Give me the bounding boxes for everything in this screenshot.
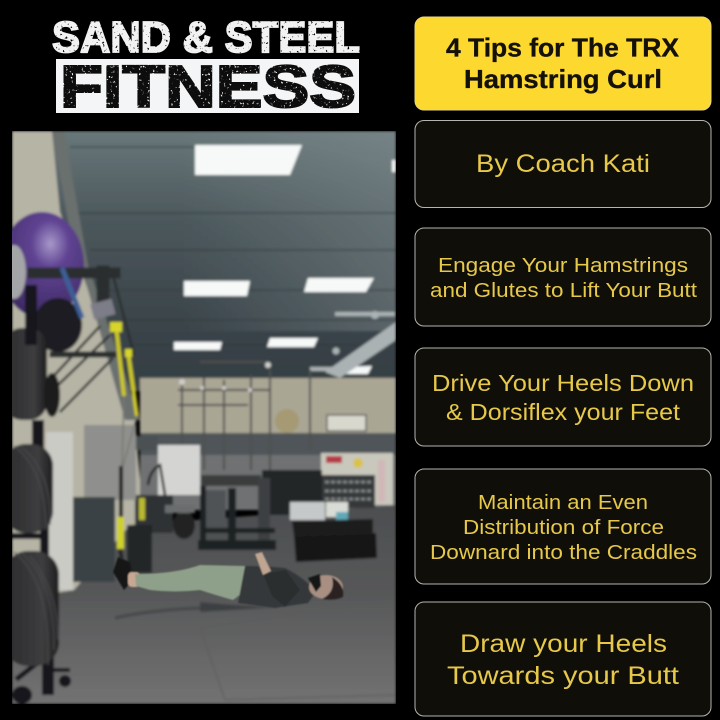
plyo boxes — [290, 502, 377, 562]
white ball edge — [12, 243, 28, 301]
hair — [322, 577, 343, 600]
white block wall — [46, 432, 73, 590]
treadmill and whiteboard — [130, 436, 200, 539]
panel: tip 1 — [415, 228, 711, 326]
dark shirt — [238, 566, 316, 608]
raised hand — [255, 552, 271, 575]
panel: title — [415, 17, 711, 110]
panel: title: Hamstring Curl — [464, 64, 662, 94]
title text: 4 Tips for The TRX — [446, 32, 680, 62]
photo: woman performing TRX hamstring curl in a gym — [0, 131, 396, 704]
athlete — [113, 552, 343, 608]
wall pillar — [52, 131, 140, 420]
bare foot — [128, 572, 140, 587]
tip 2 text: Drive Your Heels Down — [432, 370, 694, 396]
floor scuff marks — [115, 608, 200, 618]
face mask — [308, 574, 321, 592]
panel: tip 3: Downard into the Craddles — [430, 541, 697, 564]
upper stored discs — [4, 328, 60, 420]
floor shadow under body — [200, 602, 280, 612]
dark wall mat — [73, 497, 115, 582]
panel: tip 2 — [415, 348, 711, 446]
panel: tip 2: & Dorsiflex your Feet — [446, 399, 681, 425]
sleeve — [263, 570, 300, 607]
lower stored discs — [12, 442, 60, 668]
tip 4 text: Draw your Heels — [460, 630, 667, 658]
TRX yellow straps — [110, 322, 145, 560]
grey pillar — [84, 425, 136, 500]
panel: tip 3: Distribution of Force — [463, 516, 664, 539]
ceiling — [12, 131, 396, 391]
floor mat seams — [200, 600, 396, 700]
panel: tip 3 — [415, 469, 711, 584]
stored accessories — [90, 299, 116, 320]
dark stool behind foot — [127, 525, 152, 573]
panel: tip 1: and Glutes to Lift Your Butt — [430, 279, 697, 302]
panel: tip 4 — [415, 602, 711, 716]
logo line: FITNESS: FITNESS — [60, 54, 356, 120]
left wall — [12, 131, 150, 600]
gym racks — [178, 362, 310, 470]
head — [309, 575, 343, 599]
logo: Sand & Steel Fitness — [52, 13, 360, 120]
tip 1 text: Engage Your Hamstrings — [438, 254, 688, 277]
ceiling beams — [70, 146, 396, 322]
blue band — [62, 268, 82, 318]
ceiling lights — [174, 145, 396, 374]
purple exercise ball — [12, 210, 85, 314]
green leggings — [135, 565, 246, 600]
rack uprights — [12, 285, 71, 704]
lower back wall — [140, 455, 396, 510]
ceiling haze — [230, 132, 396, 332]
disc ribs — [14, 446, 58, 665]
wall shelf bracket — [28, 266, 134, 412]
author text: By Coach Kati — [476, 150, 650, 178]
ducts — [310, 311, 396, 378]
wall fan — [275, 409, 299, 433]
dark wall band — [140, 433, 396, 455]
dark gym machine and bench — [198, 470, 322, 550]
tip 3 text: Maintain an Even — [478, 491, 648, 514]
logo plate: white box — [56, 59, 359, 113]
white wall section and dumbbell rack — [321, 453, 393, 508]
panel: author — [415, 120, 711, 208]
TRX foot cradle — [113, 557, 133, 590]
floor — [12, 505, 396, 704]
framed picture — [327, 415, 366, 431]
back wall — [140, 378, 396, 435]
logo line: SAND & STEEL: SAND & STEEL — [52, 13, 360, 62]
panel: tip 4: Towards your Butt — [447, 662, 679, 690]
